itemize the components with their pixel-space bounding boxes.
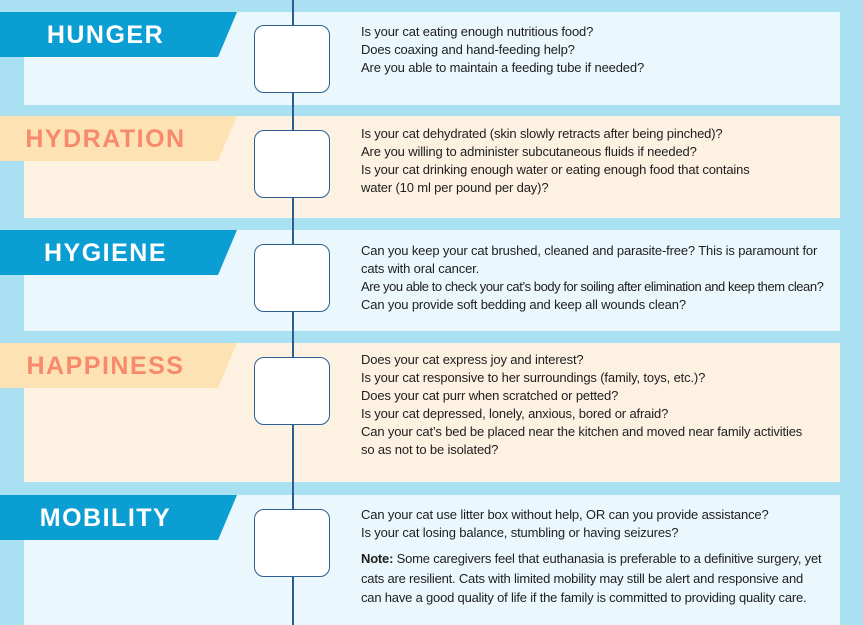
panel: hydration	[24, 116, 840, 218]
panel: mobility	[24, 495, 840, 625]
panel: happiness	[24, 343, 840, 482]
text: mobility: cats are resilient. Cats with limited mobility may still be alert and responsive and	[361, 570, 803, 586]
ribbon: hygiene	[0, 230, 237, 275]
text: hunger: Are you able to maintain a feeding tube if needed?	[361, 60, 644, 75]
ribbon: hunger: HUNGER	[47, 21, 164, 49]
box: hydration	[254, 130, 330, 198]
text: hygiene: Are you able to check your cat’s body for soiling after elimination and keep them clean?	[361, 279, 823, 294]
text: hygiene: Can you keep your cat brushed, cleaned and parasite-free? This is paramount for	[361, 243, 817, 258]
text: happiness: Does your cat purr when scratched or petted?	[361, 388, 618, 403]
panel: hunger	[24, 12, 840, 105]
ribbon: hygiene: HYGIENE	[44, 239, 167, 267]
ribbon: happiness	[0, 343, 237, 388]
panel: hygiene	[24, 230, 840, 331]
text: happiness	[361, 352, 802, 457]
text: hygiene: Can you provide soft bedding and keep all wounds clean?	[361, 297, 686, 312]
text: mobility: Is your cat losing balance, stumbling or having seizures?	[361, 525, 678, 540]
text: hydration: Are you willing to administer subcutaneous fluids if needed?	[361, 144, 697, 159]
text: happiness: so as not to be isolated?	[361, 442, 498, 457]
text: hunger	[361, 24, 644, 75]
text: hygiene	[361, 243, 824, 312]
text: happiness: Can your cat’s bed be placed near the kitchen and moved near family activities	[361, 424, 802, 439]
text: hunger: Does coaxing and hand-feeding help?	[361, 42, 575, 57]
text: hygiene: cats with oral cancer.	[361, 261, 479, 276]
text: happiness: Is your cat responsive to her surroundings (family, toys, etc.)?	[361, 370, 705, 385]
text: mobility: can have a good quality of life if the family is committed to providing quality care.	[361, 590, 806, 605]
text: hydration: water (10 ml per pound per day)?	[361, 180, 548, 195]
text: mobility: Can your cat use litter box without help, OR can you provide assistance?	[361, 507, 769, 522]
ribbon: hydration	[0, 116, 237, 161]
box: mobility	[254, 509, 330, 577]
text: mobility	[361, 507, 822, 605]
text: hydration: Is your cat drinking enough water or eating enough food that contains	[361, 162, 750, 177]
ribbon: hunger	[0, 12, 237, 57]
text: mobility: Note: Some caregivers feel that euthanasia is preferable to a definitive surgery, yet	[361, 551, 821, 566]
box: hunger	[254, 25, 330, 93]
text: hunger: Is your cat eating enough nutritious food?	[361, 24, 593, 39]
text: happiness: Does your cat express joy and interest?	[361, 352, 584, 367]
ribbon: happiness: HAPPINESS	[26, 352, 184, 380]
text: happiness: Is your cat depressed, lonely, anxious, bored or afraid?	[361, 406, 668, 421]
ribbon: mobility: MOBILITY	[40, 504, 171, 532]
box: happiness	[254, 357, 330, 425]
ribbon: hydration: HYDRATION	[25, 125, 186, 153]
timeline line	[292, 0, 294, 625]
text: hydration: Is your cat dehydrated (skin slowly retracts after being pinched)?	[361, 126, 723, 141]
ribbon: mobility	[0, 495, 237, 540]
box: hygiene	[254, 244, 330, 312]
text: hydration	[361, 126, 750, 195]
